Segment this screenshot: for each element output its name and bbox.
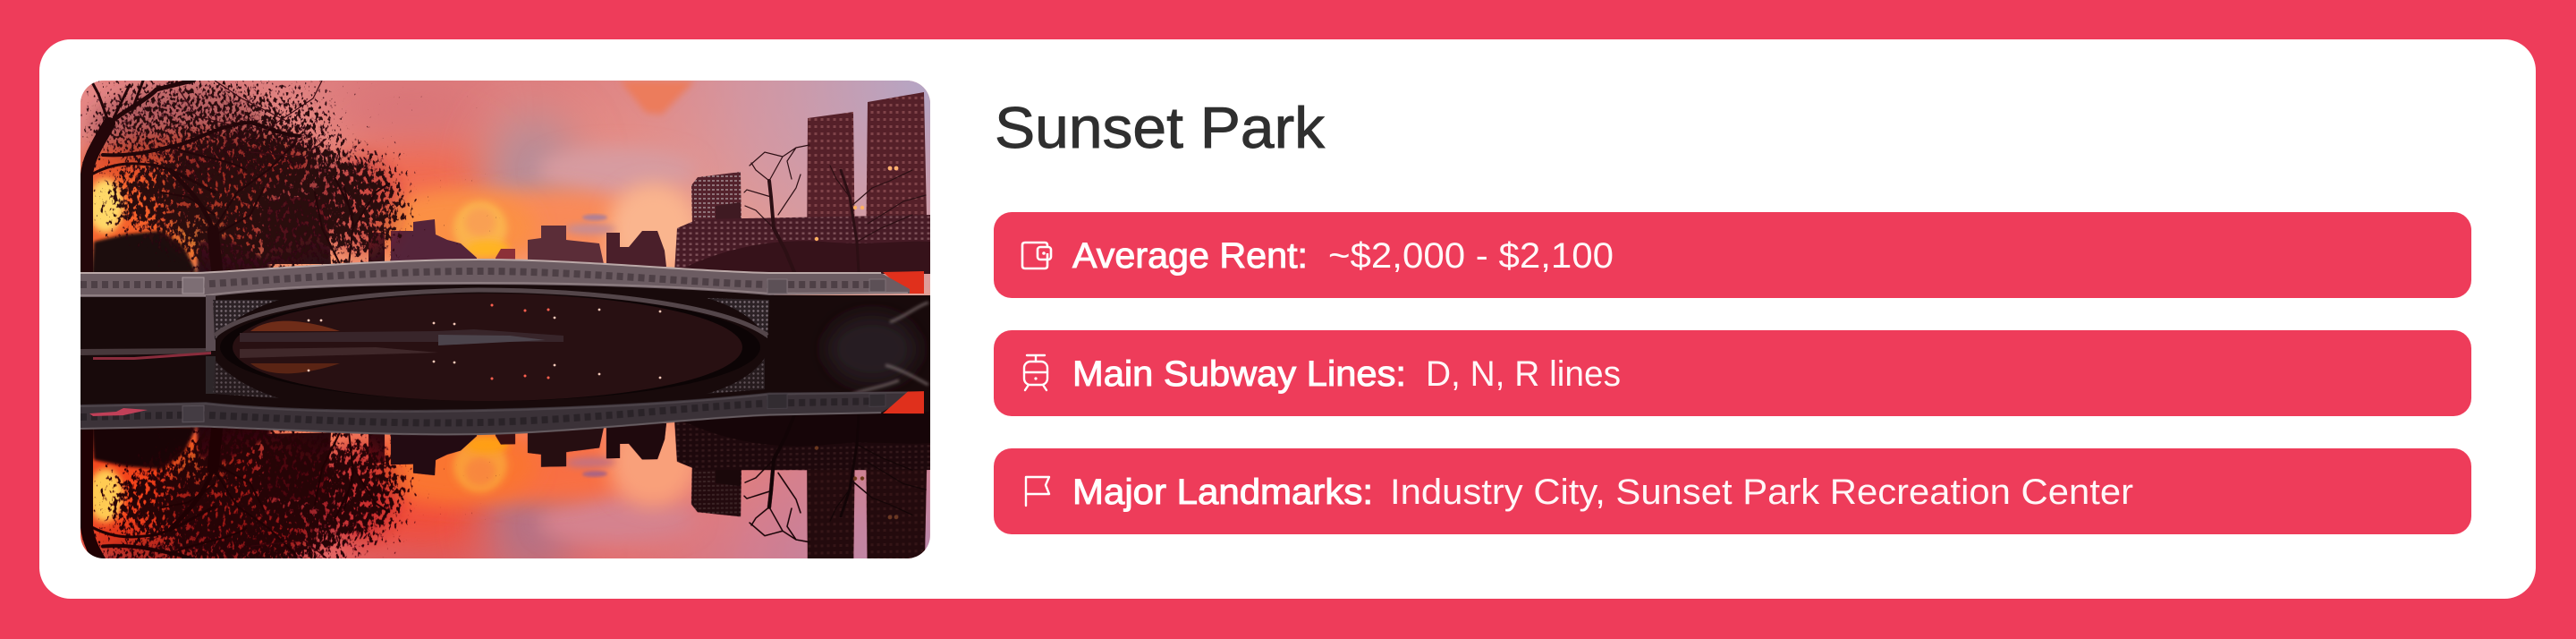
arch opening [206, 290, 769, 401]
waterline [80, 348, 211, 355]
tree limbs [87, 81, 389, 274]
info row: landmarks [994, 448, 2471, 534]
title: Sunset Park [995, 95, 1326, 160]
reflected tarp [883, 391, 924, 414]
icon: flag [1026, 477, 1049, 506]
label: subway lines: Main Subway Lines: [1072, 354, 1406, 394]
rock highlights [845, 302, 928, 398]
value: subway lines: D, N, R lines [1426, 354, 1621, 394]
sparse twigs on upper crown [76, 67, 344, 183]
red tarp [883, 271, 924, 294]
info row: average rent [994, 212, 2471, 298]
photo: sunset over bridge with reflection [80, 81, 930, 558]
bridge deck [80, 260, 910, 297]
bushes and dark building on left [264, 197, 331, 264]
upper scene: sky, skyline and trees [63, 67, 930, 304]
skyline buildings [391, 92, 930, 274]
value: rent range: ~$2,000 - $2,100 [1328, 236, 1614, 276]
bridge reflection [80, 388, 910, 442]
label: landmarks: Major Landmarks: [1072, 473, 1373, 512]
info row: subway lines [994, 330, 2471, 416]
tree colour wash [89, 85, 398, 260]
pink scrape on reflection [89, 408, 148, 416]
value: landmarks: Industry City, Sunset Park Recreation Center [1390, 473, 2133, 512]
icon: tram [1024, 355, 1047, 390]
dark water beneath bridge [80, 295, 930, 429]
label: average rent: Average Rent: [1072, 236, 1308, 276]
reflection of sky, skyline and trees in the water [80, 412, 930, 558]
lights under the arch [308, 304, 661, 379]
icon: wallet [1022, 243, 1051, 268]
dense twigs in crowns [98, 116, 407, 277]
